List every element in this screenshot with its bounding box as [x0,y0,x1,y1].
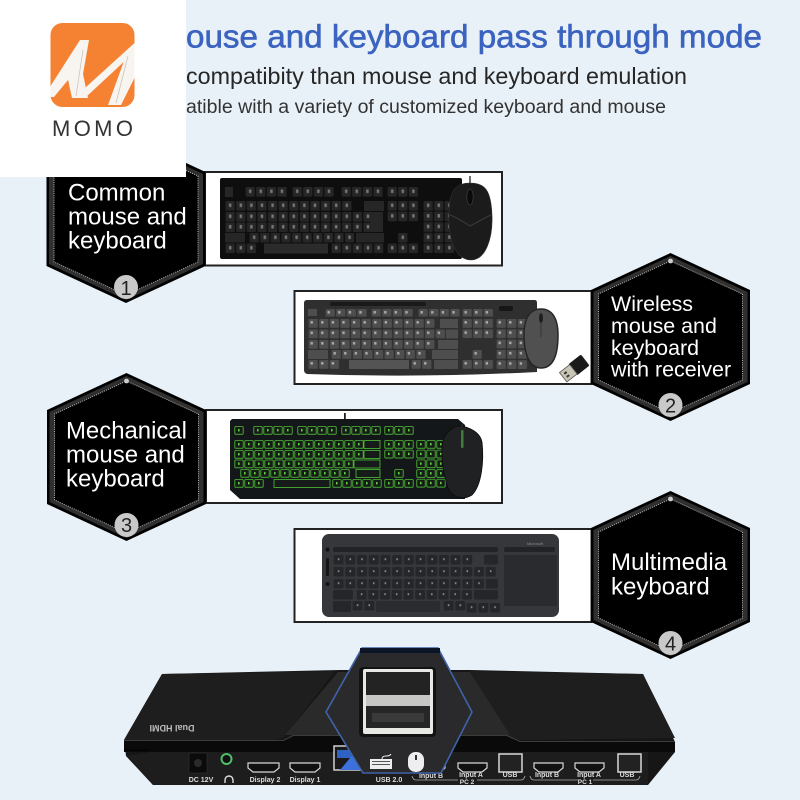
DC jack [189,753,214,784]
panel: multimedia keyboard image [294,529,592,622]
label text 4: Multimedia [611,549,728,576]
label text 2: mouse and [611,314,717,338]
label text 2: keyboard [611,336,699,360]
mechanical mouse [442,424,483,498]
multimedia keyboard body: Microsoft [527,541,544,546]
label text 1: Common [68,180,165,206]
logo wordmark: MOMO [52,116,133,141]
PC 2 ports: Input A [459,772,483,779]
PC 2 ports: PC 2 [460,779,475,786]
label text 1: mouse and [68,204,187,230]
PC 1 ports: PC 1 [578,779,593,786]
hexagon label 2 [591,253,750,421]
DC jack: DC 12V [189,777,214,784]
USB port block [359,667,436,737]
number 2: 2 [665,396,676,418]
panel: mechanical keyboard image [206,410,502,503]
left wing [124,671,335,740]
PC 1 ports: Input A [577,772,601,779]
mouse [449,176,492,260]
label text 3: keyboard [66,466,165,492]
display labels [250,777,320,784]
icon: mouse [408,752,424,772]
label text 3: mouse and [66,442,185,468]
label text 2: with receiver [610,358,731,382]
subtitle line 2: atible with a variety of customized keyboard and mouse [186,97,666,118]
icon: keyboard [370,754,392,769]
USB callout hexagon [326,648,472,773]
subtitle line 1: compatibity than mouse and keyboard emulation [186,63,687,89]
hexagon label 4 [591,491,750,659]
centre recess [285,672,510,735]
PC 1 ports: USB [620,772,634,779]
PC 2 ports [412,754,525,786]
mechanical keyboard body [230,413,465,499]
label text 3: Mechanical [66,418,187,444]
panel: wireless keyboard image [294,291,592,384]
number 1: 1 [120,278,132,300]
label text 1: keyboard [68,228,167,254]
hexagon label 3 [47,373,206,541]
audio jack [222,754,233,783]
display labels: Display 1 [290,777,320,784]
panel: common keyboard image [205,172,502,266]
USB 2.0 label: USB 2.0 [376,777,402,784]
PC 2 ports: USB [503,772,517,779]
logo panel [0,0,186,177]
PC 1 ports: Input B [535,772,559,779]
number 4: 4 [665,634,676,656]
display labels: Display 2 [250,777,280,784]
logo icon [50,23,134,107]
USB 3.0 port [334,746,360,770]
wireless mouse [524,309,558,368]
PC 2 ports: Input B [419,773,443,780]
wireless keyboard body [304,300,537,376]
label text 4: keyboard [611,574,710,600]
keyboard body [220,178,462,259]
KVM switch device [124,670,675,786]
number 3: 3 [121,515,132,537]
display ports [248,763,320,772]
title: ouse and keyboard pass through mode [186,18,762,54]
USB receiver [559,354,590,383]
multimedia keyboard body [322,534,559,617]
right wing [470,671,675,740]
brand mark: Dual HDMI [150,723,194,733]
PC 1 ports [530,754,641,786]
hexagon label 1 [46,135,206,303]
label text 2: Wireless [611,292,693,316]
